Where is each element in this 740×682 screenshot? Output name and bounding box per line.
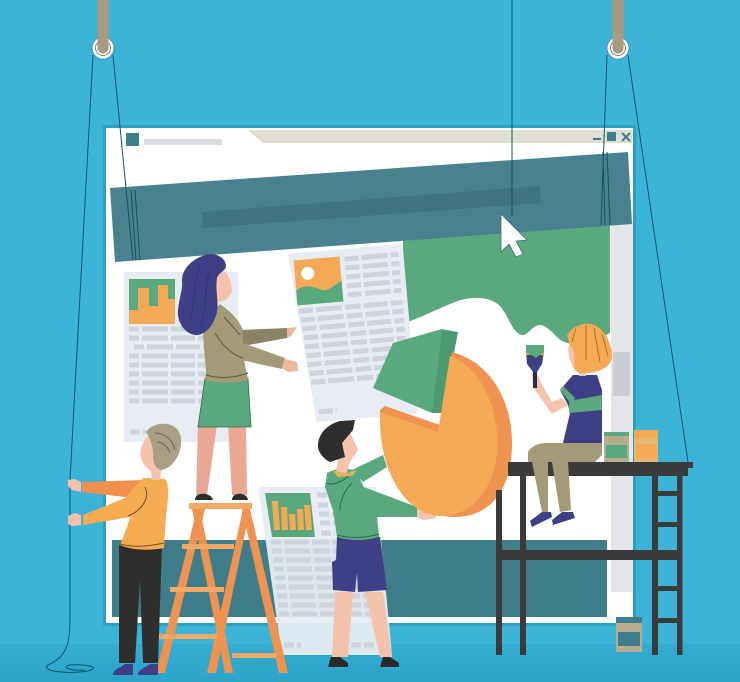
bar chart thumbnail <box>265 493 315 537</box>
pulley right <box>607 0 629 59</box>
face <box>140 436 162 480</box>
paint cans on table <box>604 430 658 462</box>
trousers <box>119 545 162 663</box>
hair <box>567 324 612 373</box>
window icon <box>126 133 139 146</box>
hoodie <box>325 469 379 540</box>
cursor arrow <box>501 214 527 257</box>
document: lower article <box>258 487 392 655</box>
pulley left <box>92 0 114 59</box>
front arm <box>220 335 285 369</box>
hair <box>318 420 355 462</box>
hoodie detail lines <box>326 472 379 538</box>
shirt stripes <box>560 386 602 413</box>
window controls <box>593 132 630 141</box>
shoes <box>195 494 248 500</box>
sweater <box>203 304 248 383</box>
torso detail lines <box>120 487 164 546</box>
back arm <box>82 480 143 498</box>
sneakers <box>530 512 575 527</box>
figure: woman on ladder <box>178 254 298 500</box>
green paint area <box>403 222 610 344</box>
scrollbar <box>611 222 633 592</box>
face <box>336 428 358 475</box>
hair strands <box>155 433 175 453</box>
floor <box>0 644 740 682</box>
orange face <box>380 356 497 516</box>
document: middle article <box>288 244 417 423</box>
shirt <box>560 375 602 443</box>
arm and hand <box>532 375 568 414</box>
text rows <box>271 495 374 645</box>
window title placeholder <box>144 139 222 145</box>
orange can <box>634 430 658 462</box>
figure: girl painting <box>526 324 612 527</box>
hand lower <box>282 359 298 372</box>
hands <box>68 479 81 526</box>
stepladder <box>156 503 288 673</box>
shoes <box>113 664 158 675</box>
front arm <box>353 483 417 517</box>
landscape thumbnail <box>294 257 343 305</box>
face <box>568 345 586 376</box>
hand upper <box>287 327 297 338</box>
lower legs <box>532 462 571 512</box>
figure: boy carrying pie <box>318 420 436 667</box>
figure: boy holding ropes <box>68 424 181 675</box>
paint brush <box>526 345 544 388</box>
panel: browser window <box>103 125 636 626</box>
hair <box>178 254 226 335</box>
legs <box>196 425 247 495</box>
face <box>214 270 232 303</box>
legs <box>332 592 392 657</box>
chart thumbnail <box>129 279 175 324</box>
hair <box>146 424 181 470</box>
hair strands <box>572 325 608 362</box>
collar <box>333 470 357 477</box>
hair strands <box>190 265 210 325</box>
text rows <box>295 254 412 413</box>
title bar tab <box>248 130 632 143</box>
paint can on floor <box>616 617 642 652</box>
ladder steps <box>158 503 276 658</box>
text rows <box>129 329 205 432</box>
torso and arm <box>83 478 168 550</box>
shoes <box>328 657 399 667</box>
shorts <box>332 537 387 592</box>
sweater detail lines <box>206 317 248 377</box>
banner <box>110 152 632 262</box>
document: left article <box>124 272 238 442</box>
upper arm <box>352 455 387 482</box>
hand <box>417 508 436 520</box>
back arm <box>241 328 287 346</box>
pie chart <box>373 329 512 517</box>
thigh <box>528 443 602 462</box>
footer band <box>112 540 607 617</box>
skirt <box>198 378 251 427</box>
green can <box>604 432 629 462</box>
orange rim <box>380 352 512 517</box>
green slice <box>373 329 458 413</box>
table <box>496 462 693 655</box>
